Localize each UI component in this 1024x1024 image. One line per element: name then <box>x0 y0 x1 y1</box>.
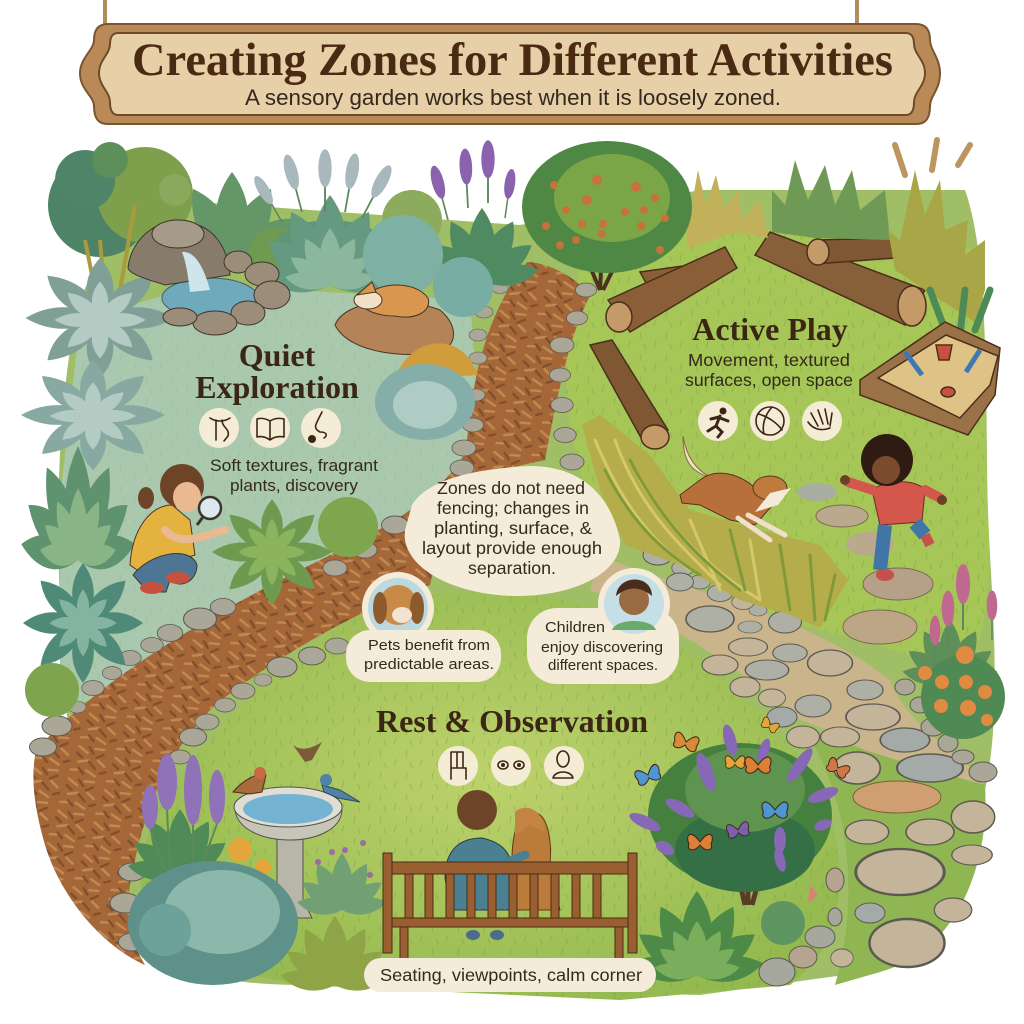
callout: pets: predictable areas. <box>364 656 494 673</box>
caption: rest and observation <box>364 958 656 992</box>
central callout: separation. <box>468 558 556 578</box>
text: quiet exploration: plants, discovery <box>230 476 358 495</box>
icon: book <box>250 408 290 448</box>
leafy plants front <box>212 497 378 605</box>
callout: children: enjoy discovering <box>541 639 663 656</box>
back planting left <box>48 140 541 317</box>
silver plants left <box>19 258 174 717</box>
central callout: planting, surface, & <box>434 518 592 538</box>
icons: active play <box>698 401 842 441</box>
central callout: Zones do not need <box>437 478 585 498</box>
sandbox <box>860 322 1000 435</box>
callout: children: Children <box>545 619 605 636</box>
flowers right edge <box>895 564 1005 782</box>
icons: rest and observation <box>438 746 584 786</box>
callout: children <box>527 568 679 684</box>
child running <box>797 434 947 600</box>
text: active play: surfaces, open space <box>685 370 853 390</box>
pond with waterfall <box>128 220 290 335</box>
yellow and silver mounds near path <box>375 343 478 440</box>
portrait: child <box>598 568 670 640</box>
heading: quiet exploration: Exploration <box>195 369 359 405</box>
cat on rock <box>335 282 454 355</box>
text: quiet exploration <box>210 456 378 495</box>
callout: pets <box>346 572 501 682</box>
zone: stone path bed <box>590 555 985 800</box>
back planting right <box>522 140 990 335</box>
caption: rest and observation: Seating, viewpoints, calm corner <box>380 965 642 985</box>
purple flower plant and bird bath <box>126 742 391 995</box>
text: active play <box>685 350 853 390</box>
callout: children: different spaces. <box>548 657 658 674</box>
icon: calm person <box>544 746 584 786</box>
zone: rest lawn <box>141 593 840 1000</box>
heading: active play: Active Play <box>692 311 848 347</box>
boy and dog on bench <box>383 790 637 959</box>
title sign <box>80 24 940 124</box>
text: quiet exploration: Soft textures, fragrant <box>210 456 378 475</box>
icons: quiet exploration <box>199 408 341 448</box>
icon: ball <box>750 401 790 441</box>
central callout <box>405 466 620 596</box>
subtitle: A sensory garden works best when it is loosely zoned. <box>245 85 781 110</box>
hanging ropes <box>105 0 857 26</box>
portrait: dog <box>362 572 434 644</box>
zone: quiet exploration lawn <box>60 285 480 710</box>
title: Creating Zones for Different Activities <box>132 34 893 86</box>
front foliage right <box>629 868 844 987</box>
text: active play: Movement, textured <box>688 350 850 370</box>
bench <box>383 853 637 959</box>
dog running <box>680 436 791 540</box>
callout: pets: Pets benefit from <box>368 637 490 654</box>
child with magnifier <box>130 464 225 594</box>
garden ground <box>58 190 995 1000</box>
central callout: fencing; changes in <box>437 498 589 518</box>
icon: eyes <box>491 746 531 786</box>
icon: runner <box>698 401 738 441</box>
butterfly bush <box>627 716 851 905</box>
icon: chair <box>438 746 478 786</box>
heading: quiet exploration <box>195 337 359 405</box>
icon: nose and flower <box>301 408 341 448</box>
mulch path <box>33 262 590 965</box>
icon: plant touch <box>199 408 239 448</box>
heading: rest and observation: Rest & Observation <box>376 703 648 739</box>
central callout: layout provide enough <box>422 538 602 558</box>
zone: active play lawn <box>566 230 990 680</box>
icon: hand <box>802 401 842 441</box>
large sandstone slab <box>853 781 941 813</box>
tall grass band <box>582 415 848 628</box>
bird bath <box>233 742 360 918</box>
logs <box>590 232 926 449</box>
shrub <box>48 153 152 257</box>
stepping stone path <box>643 545 995 967</box>
heading: quiet exploration: Quiet <box>239 337 316 373</box>
border stones: mulch path edges <box>30 282 596 951</box>
